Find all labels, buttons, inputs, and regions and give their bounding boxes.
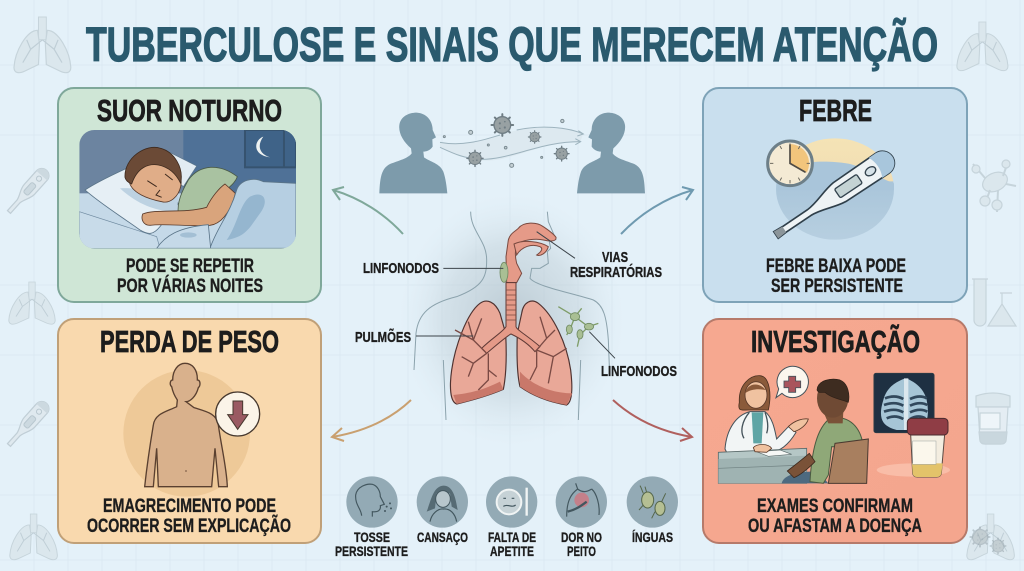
symptom label: dor no peito: PEITO — [567, 544, 596, 559]
symptom label: falta de apetite: APETITE — [490, 544, 534, 559]
description: perda de peso: OCORRER SEM EXPLICAÇÃO — [87, 514, 291, 537]
label: linfonodos: LINFONODOS — [363, 261, 439, 277]
description: suor noturno — [117, 255, 263, 297]
description: perda de peso: EMAGRECIMENTO PODE — [103, 495, 276, 517]
label: pulmões: PULMÕES — [355, 328, 411, 346]
description: perda de peso — [87, 495, 291, 537]
label: vias respiratórias: VIAS — [602, 250, 628, 266]
heading: investigação: INVESTIGAÇÃO — [751, 324, 920, 359]
decorative icons: left margin — [4, 17, 71, 560]
symptom label: falta de apetite: FALTA DE — [488, 530, 536, 545]
arrow: to febre — [621, 187, 693, 234]
illustration: clock and thermometer — [768, 138, 899, 245]
panel: perda de peso — [58, 319, 321, 543]
symptom label: tosse persistente: TOSSE — [354, 530, 390, 545]
symptom label: falta de apetite — [488, 530, 536, 559]
symptom label: tosse persistente — [335, 530, 408, 559]
symptom label: dor no peito: DOR NO — [561, 530, 602, 545]
panel: febre — [703, 88, 967, 302]
icon: ínguas — [627, 476, 678, 528]
arrow: to investigação — [613, 400, 692, 441]
label: vias respiratórias: RESPIRATÓRIAS — [570, 263, 662, 281]
decorative icons: right margin — [957, 22, 1016, 560]
label: vias respiratórias — [570, 250, 662, 281]
label: linfonodos torácicos: LINFONODOS — [601, 364, 677, 380]
description: febre: FEBRE BAIXA PODE — [766, 255, 906, 277]
anatomy diagram: airways, lungs and lymph nodes — [398, 193, 625, 447]
symptom label: cansaço: CANSAÇO — [417, 530, 468, 545]
description: suor noturno: PODE SE REPETIR — [126, 255, 254, 277]
icon: cansaço — [417, 476, 468, 528]
symptom label: dor no peito — [561, 530, 602, 559]
icon: falta de apetite — [486, 476, 537, 528]
heading: suor noturno: SUOR NOTURNO — [97, 93, 282, 128]
illustration: person sleeping and sweating — [79, 130, 296, 248]
heading: perda de peso: PERDA DE PESO — [100, 324, 279, 359]
icon: dor no peito — [556, 476, 607, 528]
panel: suor noturno — [58, 88, 321, 302]
heading: febre: FEBRE — [799, 93, 872, 128]
arrow: to perda de peso — [332, 400, 411, 441]
description: febre — [766, 255, 906, 297]
symptom label: tosse persistente: PERSISTENTE — [335, 544, 408, 559]
description: investigação — [748, 495, 922, 537]
symptom icons row — [346, 476, 678, 528]
description: suor noturno: POR VÁRIAS NOITES — [117, 274, 263, 297]
description: investigação: EXAMES CONFIRMAM — [757, 495, 913, 517]
transmission scene: two people and airborne bacteria — [379, 113, 645, 193]
arrow: to suor noturno — [333, 187, 403, 234]
description: investigação: OU AFASTAM A DOENÇA — [748, 515, 922, 537]
icon: tosse — [346, 476, 398, 528]
illustration: body with weight loss arrow — [123, 363, 260, 497]
panel: investigação — [703, 319, 967, 543]
description: febre: SER PERSISTENTE — [771, 275, 903, 297]
symptom label: ínguas: ÍNGUAS — [632, 530, 673, 545]
illustration: doctor, patient, x-ray and sample — [718, 366, 950, 483]
